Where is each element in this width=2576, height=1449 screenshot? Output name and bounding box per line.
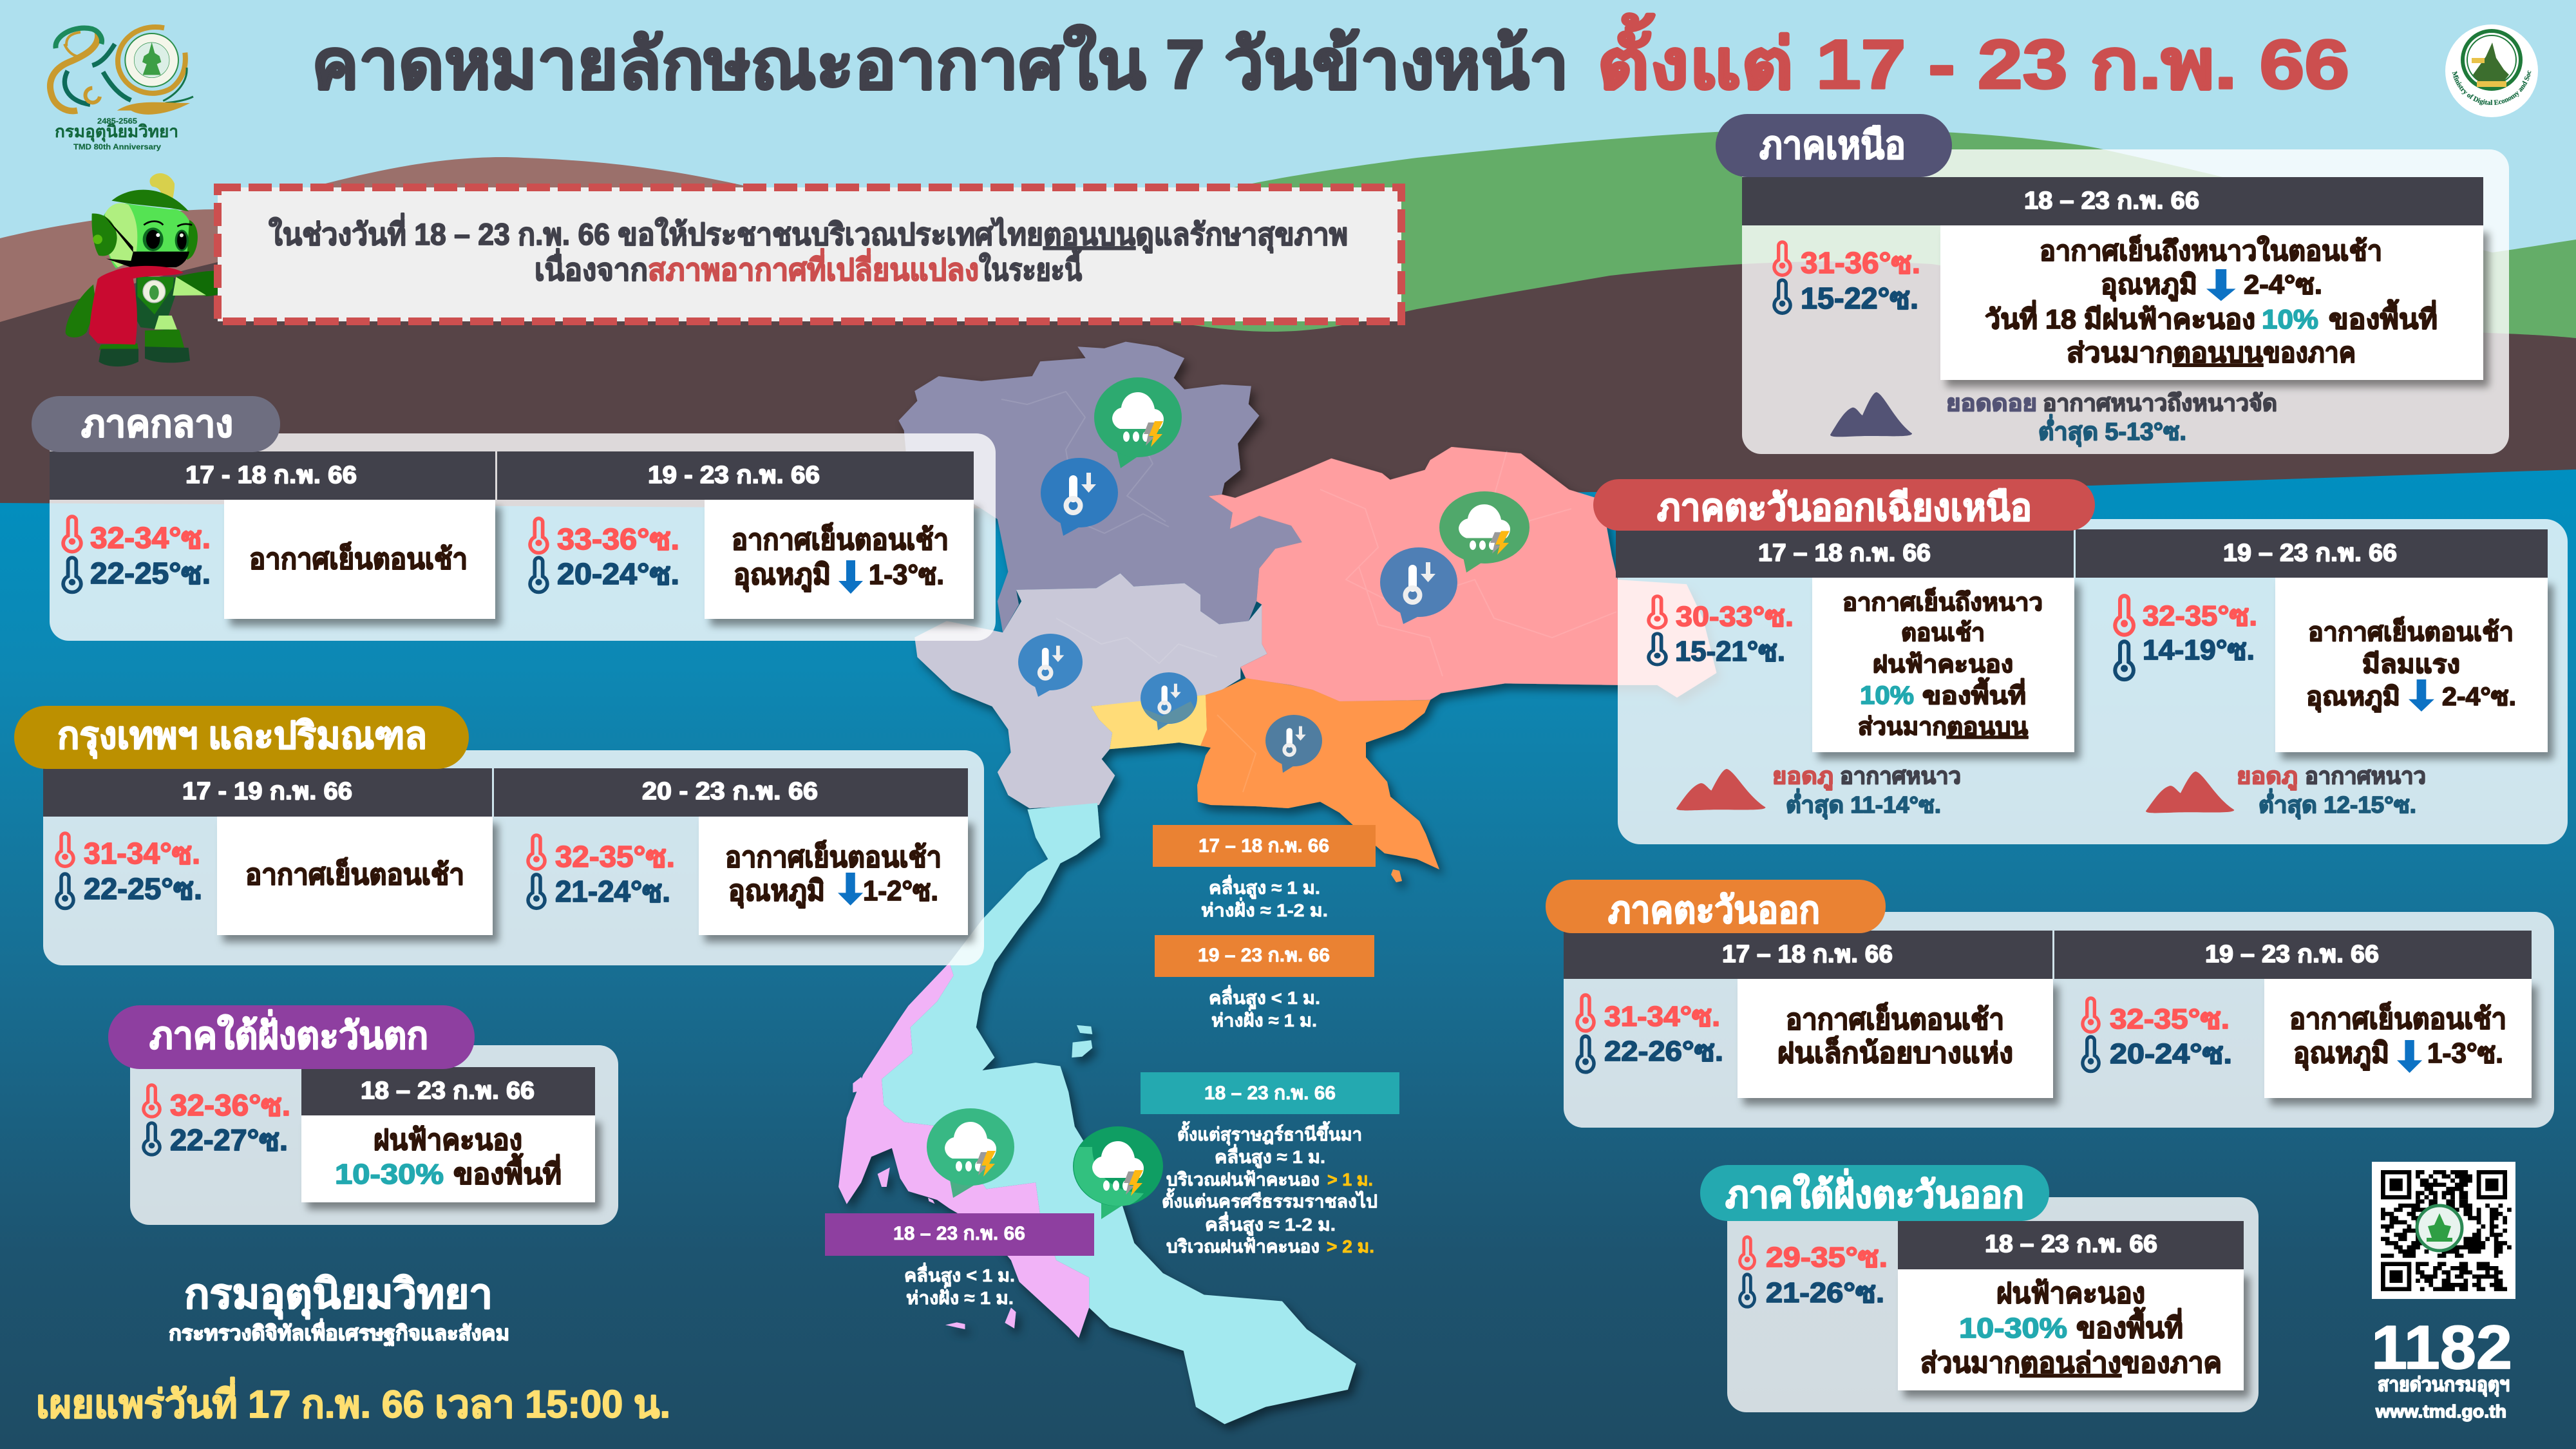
heading pill: south west: ภาคใต้ฝั่งตะวันตก — [149, 1009, 428, 1057]
panel: Bangkok and vicinity: 31-34°ซ. — [84, 837, 200, 870]
icon: mountain north — [1830, 392, 1912, 437]
panel: north: ส่วนมาก — [2067, 337, 2173, 368]
alert box — [218, 187, 1401, 321]
panel: north: ต่ำสุด 5-13°ซ. — [2038, 414, 2186, 447]
panel: east: 17 – 18 ก.พ. 66 — [1722, 941, 1893, 968]
weather pin: north rain — [1094, 377, 1182, 468]
panel: south east coast: 29-35°ซ. — [1766, 1242, 1888, 1273]
panel: east: อากาศเย็นตอนเช้า — [1786, 1002, 2004, 1036]
heading pill: south west — [108, 1005, 475, 1069]
sea forecast: south east coast: ตั้งแต่นครศรีธรรมราชลงไป — [1162, 1188, 1378, 1211]
panel: east: ฝนเล็กน้อยบางแห่ง — [1777, 1036, 2013, 1069]
panel: Bangkok and vicinity: อุณหภูมิ — [728, 875, 825, 909]
alert box: ตอนบน — [1043, 217, 1135, 251]
panel: northeast: 10% — [1860, 681, 1914, 710]
panel: northeast: อากาศหนาว — [1840, 762, 1961, 789]
panel: northeast: อุณหภูมิ — [2306, 683, 2400, 713]
hotline — [2371, 1313, 2512, 1421]
panel: northeast: ของพื้นที่ — [1922, 677, 2026, 710]
panel: northeast: ตอนบน — [1947, 714, 2028, 741]
sea forecast: south west coast: ห่างฝั่ง ≈ 1 ม. — [906, 1285, 1014, 1308]
logo: TMD 80th anniversary — [50, 27, 193, 151]
panel: central: 33-36°ซ. — [557, 522, 679, 556]
sea forecast: south west coast — [825, 1213, 1094, 1308]
panel: northeast: 2-4°ซ. — [2442, 683, 2516, 711]
panel: central: 22-25°ซ. — [90, 556, 211, 590]
alert box: ดูแลรักษาสุขภาพ — [1135, 217, 1348, 254]
logo: TMD 80th anniversary: กรมอุตุนิยมวิทยา — [55, 122, 178, 142]
background hills — [0, 129, 2576, 515]
panel: east: อากาศเย็นตอนเช้า — [2289, 1001, 2506, 1035]
panel: north: อุณหภูมิ — [2101, 269, 2197, 301]
panel: south west coast: 22-27°ซ. — [170, 1123, 288, 1157]
panel: south east coast: 18 – 23 ก.พ. 66 — [1985, 1231, 2157, 1258]
panel: north: อากาศเย็นถึงหนาวในตอนเช้า — [2040, 234, 2382, 266]
mascot — [66, 173, 235, 366]
panel: south east coast: ของพื้นที่ — [2076, 1307, 2183, 1344]
heading pill: east — [1546, 880, 1886, 933]
hotline: 1182 — [2371, 1313, 2512, 1382]
organisation name: กระทรวงดิจิทัลเพื่อเศรษฐกิจและสังคม — [169, 1318, 509, 1347]
logo: Ministry of Digital Economy and Society — [2445, 24, 2538, 117]
weather pin: east cool — [1265, 715, 1322, 773]
sea forecast: south east coast: บริเวณฝนฟ้าคะนอง — [1166, 1170, 1320, 1189]
heading pill: east: ภาคตะวันออก — [1608, 889, 1820, 931]
hotline: www.tmd.go.th — [2375, 1401, 2506, 1421]
icon: mountain northeast left — [1676, 769, 1765, 810]
panel: north: อากาศหนาวถึงหนาวจัด — [2043, 390, 2277, 416]
panel: Bangkok and vicinity: 22-25°ซ. — [84, 872, 202, 905]
panel: north: ตอนบน — [2173, 337, 2263, 368]
panel: Bangkok and vicinity: อากาศเย็นตอนเช้า — [245, 857, 464, 891]
heading pill: south east — [1700, 1165, 2049, 1221]
weather pin: central cool — [1018, 634, 1083, 697]
map: northeast region — [1209, 447, 1716, 701]
logo: TMD 80th anniversary: TMD 80th Anniversary — [73, 142, 161, 151]
panel: northeast: 17 – 18 ก.พ. 66 — [1758, 540, 1931, 567]
panel: northeast: ต่ำสุด 11-14°ซ. — [1786, 788, 1941, 820]
sea forecast: south west coast: 18 – 23 ก.พ. 66 — [893, 1223, 1025, 1244]
panel: northeast: อากาศหนาว — [2305, 762, 2426, 789]
panel: south east coast: ฝนฟ้าคะนอง — [1996, 1278, 2145, 1309]
panel: east: อุณหภูมิ — [2293, 1037, 2389, 1071]
sea forecast: south east coast: คลื่นสูง ≈ 1-2 ม. — [1205, 1211, 1336, 1236]
panel: Bangkok and vicinity: 17 - 19 ก.พ. 66 — [182, 778, 352, 805]
panel: central: อากาศเย็นตอนเช้า — [249, 542, 468, 575]
sea forecast: east coast: 17 – 18 ก.พ. 66 — [1198, 835, 1329, 857]
panel: north: 31-36°ซ. — [1801, 246, 1920, 279]
panel: north: ยอดดอย — [1946, 390, 2037, 416]
panel: central: 32-34°ซ. — [90, 521, 211, 554]
panel: east — [1546, 880, 2554, 1128]
weather pin: northeast rain — [1439, 491, 1530, 573]
panel: northeast: อากาศเย็นถึงหนาว — [1842, 587, 2043, 616]
QR code — [2372, 1162, 2515, 1299]
panel: south west coast: 32-36°ซ. — [170, 1088, 290, 1122]
panel: east: 20-24°ซ. — [2110, 1038, 2232, 1070]
panel: north: ของภาค — [2263, 337, 2356, 368]
panel: northeast: มีลมแรง — [2362, 650, 2460, 679]
sea forecast: east coast: คลื่นสูง < 1 ม. — [1209, 985, 1320, 1009]
sea forecast: east coast: 19 – 23 ก.พ. 66 — [1198, 945, 1330, 966]
panel: northeast: 15-21°ซ. — [1675, 636, 1785, 667]
panel: Bangkok and vicinity: 32-35°ซ. — [555, 840, 675, 873]
panel: south east coast: ตอนล่าง — [2020, 1347, 2121, 1379]
map: central region — [914, 573, 1267, 808]
organisation name: กรมอุตุนิยมวิทยา — [184, 1271, 493, 1320]
heading pill: north — [1716, 114, 1952, 177]
panel: central: อากาศเย็นตอนเช้า — [732, 522, 949, 556]
publish date: เผยแพร่วันที่ 17 ก.พ. 66 เวลา 15:00 น. — [36, 1377, 670, 1426]
panel: north: 18 – 23 ก.พ. 66 — [2024, 187, 2199, 214]
sea forecast: south east coast: บริเวณฝนฟ้าคะนอง — [1166, 1236, 1320, 1256]
sea forecast: south west coast: คลื่นสูง < 1 ม. — [904, 1262, 1015, 1287]
panel: east: 32-35°ซ. — [2110, 1003, 2230, 1035]
map of Thailand — [838, 342, 1716, 1424]
weather pin: Bangkok cool — [1141, 672, 1197, 730]
panel: south west coast: 18 – 23 ก.พ. 66 — [361, 1077, 535, 1104]
panel: northeast: ยอดภู — [2237, 762, 2298, 791]
panel: Bangkok and vicinity: 21-24°ซ. — [555, 875, 670, 908]
panel: south east coast — [1700, 1165, 2259, 1412]
panel: Bangkok and vicinity — [14, 706, 984, 965]
heading pill: Bangkok — [14, 706, 469, 769]
panel: north — [1716, 114, 2509, 454]
panel: northeast: ยอดภู — [1772, 762, 1833, 791]
province boundary lines — [1001, 386, 1616, 792]
panel: northeast: อากาศเย็นตอนเช้า — [2308, 616, 2514, 647]
hotline: สายด่วนกรมอุตุฯ — [2378, 1374, 2510, 1397]
weather pin: south east rain — [1073, 1126, 1163, 1219]
sea forecast: east coast: ห่างฝั่ง ≈ 1 ม. — [1211, 1007, 1317, 1030]
panel: south east coast: 10-30% — [1959, 1312, 2067, 1344]
panel: northeast: ฝนฟ้าคะนอง — [1873, 651, 2013, 678]
heading pill: northeast — [1593, 479, 2095, 531]
panel: northeast: 19 – 23 ก.พ. 66 — [2223, 540, 2397, 567]
panel: northeast: ต่ำสุด 12-15°ซ. — [2259, 788, 2416, 820]
panel: central: อุณหภูมิ — [734, 559, 831, 592]
alert box: ในระยะนี้ — [979, 247, 1083, 287]
weather pin: northeast cool — [1380, 547, 1457, 624]
panel: Bangkok and vicinity: 20 - 23 ก.พ. 66 — [642, 778, 818, 805]
panel: east: 31-34°ซ. — [1604, 1001, 1720, 1032]
panel: northeast — [1593, 479, 2568, 844]
panel: northeast: ตอนเช้า — [1901, 620, 1985, 647]
panel: central: 17 - 18 ก.พ. 66 — [185, 462, 357, 489]
heading pill: Bangkok: กรุงเทพฯ และปริมณฑล — [57, 715, 427, 759]
panel: north: 10% — [2262, 304, 2318, 334]
sea forecast: east coast: คลื่นสูง ≈ 1 ม. — [1209, 875, 1320, 899]
panel: north: ของพื้นที่ — [2329, 299, 2438, 334]
panel: northeast: 32-35°ซ. — [2143, 600, 2257, 632]
panel: north: 15-22°ซ. — [1801, 281, 1918, 315]
panel: Bangkok and vicinity: อากาศเย็นตอนเช้า — [725, 840, 942, 873]
panel: central: 1-3°ซ. — [869, 559, 944, 591]
panel: south west coast: ของพื้นที่ — [453, 1153, 562, 1190]
panel: northeast: ส่วนมาก — [1858, 714, 1947, 741]
title: คาดหมายลักษณะอากาศใน 7 วันข้างหน้า — [312, 25, 1569, 103]
alert box: เนื่องจาก — [535, 248, 648, 287]
panel: northeast: 14-19°ซ. — [2143, 634, 2255, 666]
panel: south west coast: 10-30% — [335, 1159, 444, 1190]
background sea — [0, 469, 2576, 1449]
weather pin: north cool — [1041, 458, 1118, 536]
map: Bangkok region — [1091, 695, 1211, 749]
panel: central — [32, 396, 996, 641]
panel: south east coast: ของภาค — [2121, 1347, 2222, 1379]
organisation name — [169, 1271, 509, 1347]
panel: Bangkok and vicinity: 1-2°ซ. — [863, 875, 938, 907]
title — [312, 13, 2349, 103]
panel: south west coast — [108, 1005, 618, 1225]
sea forecast: south east coast: > 2 ม. — [1327, 1236, 1374, 1256]
sea forecast: south east coast: ตั้งแต่สุราษฎร์ธานีขึ้นมา — [1177, 1121, 1362, 1146]
sea forecast: south east coast: คลื่นสูง ≈ 1 ม. — [1215, 1144, 1325, 1168]
logo: TMD 80th anniversary: 2485-2565 — [97, 117, 137, 126]
heading pill: north: ภาคเหนือ — [1759, 124, 1906, 167]
panel: south east coast: 21-26°ซ. — [1766, 1277, 1884, 1309]
map: east region — [1197, 678, 1439, 882]
panel: north: วันที่ 18 มีฝนฟ้าคะนอง — [1985, 300, 2255, 334]
sea forecast: south east coast: > 1 ม. — [1327, 1170, 1373, 1189]
panel: north: 2-4°ซ. — [2244, 269, 2322, 299]
sea forecast: east coast: ห่างฝั่ง ≈ 1-2 ม. — [1201, 897, 1328, 920]
map: south west coast — [838, 963, 1089, 1338]
panel: central: 20-24°ซ. — [557, 557, 679, 591]
map: north region — [898, 342, 1302, 632]
title: ตั้งแต่ 17 - 23 ก.พ. 66 — [1597, 13, 2349, 103]
panel: south west coast: ฝนฟ้าคะนอง — [374, 1124, 522, 1156]
heading pill: central — [32, 396, 280, 452]
weather pin: south west rain — [927, 1108, 1014, 1198]
map: south east coast — [882, 803, 1356, 1424]
alert box: สภาพอากาศที่เปลี่ยนแปลง — [648, 248, 979, 287]
alert box: ในช่วงวันที่ 18 – 23 ก.พ. 66 ขอให้ประชาชนบริเวณประเทศไทย — [269, 213, 1043, 251]
icon: mountain northeast right — [2146, 772, 2234, 813]
sea forecast: south east coast: 18 – 23 ก.พ. 66 — [1204, 1083, 1336, 1104]
sea forecast: east coast — [1153, 825, 1376, 1030]
panel: northeast: 30-33°ซ. — [1676, 601, 1794, 632]
sea forecast: south east coast — [1141, 1072, 1399, 1256]
heading pill: south east: ภาคใต้ฝั่งตะวันออก — [1725, 1168, 2024, 1216]
heading pill: northeast: ภาคตะวันออกเฉียงเหนือ — [1657, 487, 2032, 529]
panel: east: 22-26°ซ. — [1604, 1036, 1723, 1067]
panel: south east coast: ส่วนมาก — [1920, 1347, 2020, 1379]
heading pill: central: ภาคกลาง — [81, 403, 233, 445]
panel: central: 19 - 23 ก.พ. 66 — [648, 462, 820, 489]
panel: east: 19 – 23 ก.พ. 66 — [2205, 941, 2379, 968]
panel: east: 1-3°ซ. — [2427, 1037, 2503, 1069]
